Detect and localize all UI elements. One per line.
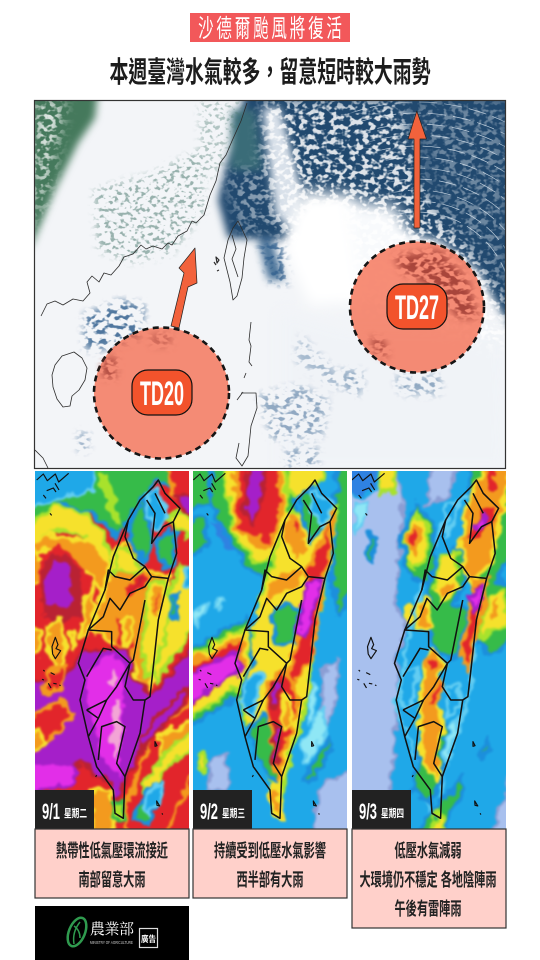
caption 9/1: 南部留意大雨 xyxy=(78,869,146,890)
panel: rainfall map 9/1 xyxy=(35,471,189,828)
caption 9/3 xyxy=(352,829,506,928)
logo: Ministry of Agriculture notice: 廣告 xyxy=(141,934,156,944)
circle: TD27 xyxy=(350,242,484,373)
caption 9/2: 持續受到低壓水氣影響 xyxy=(214,840,326,861)
arrow: TD20 heading north-east xyxy=(171,248,197,328)
arrow: TD27 heading north xyxy=(408,111,426,228)
circle: TD20 xyxy=(94,328,229,458)
satellite clouds and sea xyxy=(35,101,505,468)
rainfall bands 9/3 xyxy=(352,471,506,828)
tag heading: 沙德爾颱風將復活 xyxy=(198,15,342,43)
icon: green leaf emblem xyxy=(64,915,90,949)
panel: satellite image xyxy=(34,100,506,470)
logo: Ministry of Agriculture notice xyxy=(35,906,189,960)
date label 9/1 xyxy=(35,790,94,829)
circle: TD20: TD20 xyxy=(140,375,184,413)
date label 9/3 xyxy=(352,790,411,829)
date label 9/3: 星期四 xyxy=(381,806,404,820)
caption 9/1 xyxy=(35,829,189,898)
date label 9/2: 星期三 xyxy=(222,806,245,820)
date label 9/1: 9/1 xyxy=(42,799,60,824)
logo: Ministry of Agriculture notice: MINISTRY OF AGRICULTURE xyxy=(90,940,133,945)
rainfall bands 9/1 xyxy=(35,471,189,828)
coastlines xyxy=(35,103,257,468)
circle: TD27: TD27 xyxy=(395,289,439,327)
caption 9/2: 西半部有大雨 xyxy=(236,869,304,890)
panel: rainfall map 9/2 xyxy=(193,471,347,828)
caption 9/2 xyxy=(193,829,347,898)
caption 9/1: 熱帶性低氣壓環流接近 xyxy=(56,840,168,861)
caption 9/3: 低壓水氣減弱 xyxy=(394,840,462,861)
rainfall bands 9/2 xyxy=(193,471,347,828)
date label 9/1: 星期二 xyxy=(64,806,87,820)
caption 9/3: 午後有雷陣雨 xyxy=(394,899,462,919)
panel: rainfall map 9/3 xyxy=(352,471,506,828)
date label 9/2 xyxy=(193,790,252,829)
border xyxy=(34,100,506,468)
date label 9/3: 9/3 xyxy=(359,799,377,824)
date label 9/2: 9/2 xyxy=(200,799,218,824)
logo: Ministry of Agriculture notice: 農業部 xyxy=(90,921,134,938)
